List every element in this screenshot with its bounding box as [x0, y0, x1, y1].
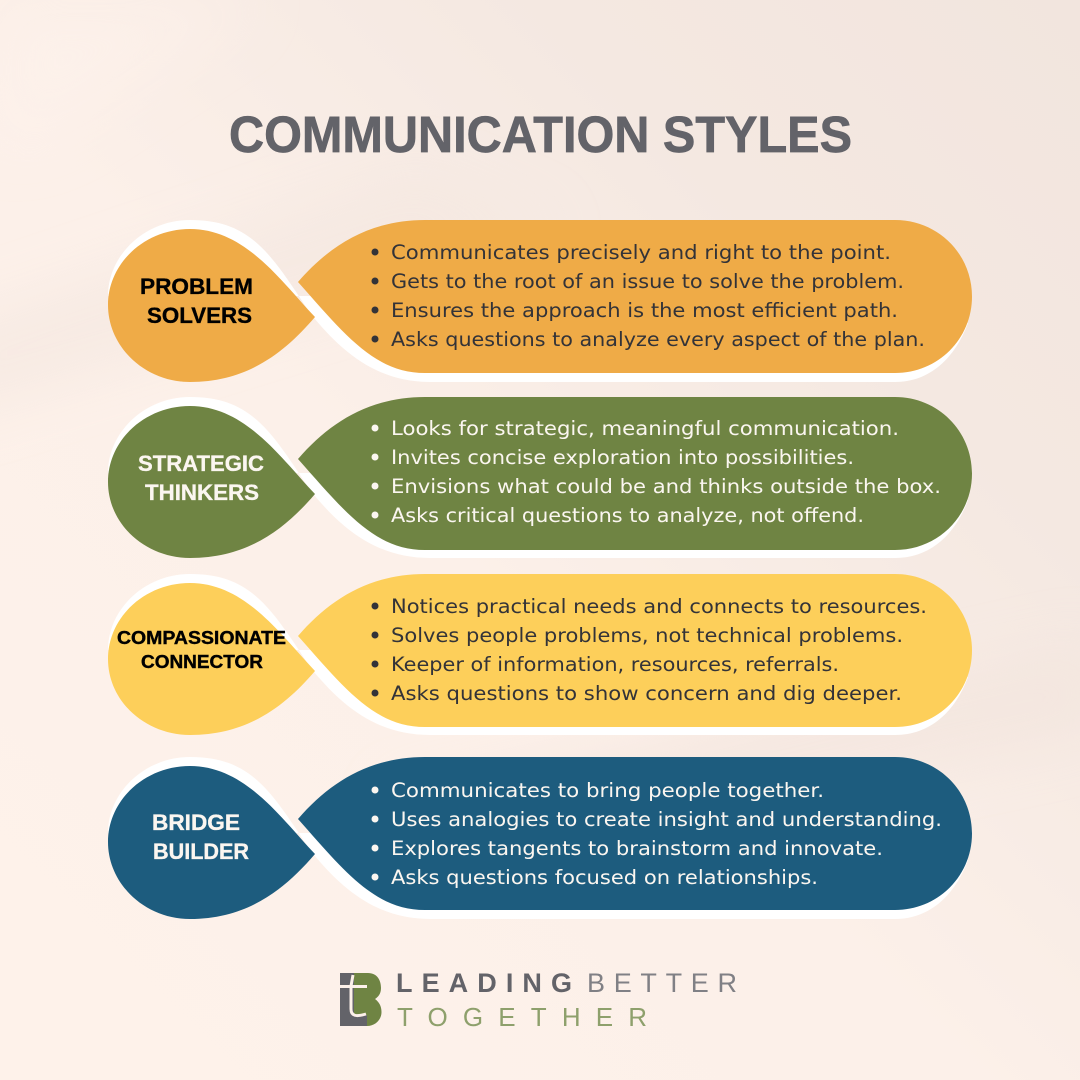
bullet list [372, 241, 925, 351]
bullet list: Gets to the root of an issue to solve the problem. [391, 270, 904, 293]
text pill [298, 220, 972, 373]
logo [340, 968, 737, 1032]
bullet list: Asks critical questions to analyze, not offend. [391, 504, 864, 527]
bullet list [372, 417, 941, 527]
bullet list: Notices practical needs and connects to resources. [391, 595, 927, 618]
icon: logo mark [340, 973, 382, 1026]
label: PROBLEM [140, 274, 253, 299]
bullet list: Communicates precisely and right to the point. [391, 241, 891, 264]
bullet list: Asks questions to analyze every aspect of the plan. [391, 328, 925, 351]
title: COMMUNICATION STYLES [229, 106, 852, 163]
bullet list: Communicates to bring people together. [391, 779, 824, 802]
label: BRIDGE [152, 810, 240, 835]
label: SOLVERS [147, 303, 252, 328]
white backing band [108, 757, 968, 919]
bullet list [372, 595, 927, 705]
bullet list: Envisions what could be and thinks outside the box. [391, 475, 941, 498]
text pill [298, 397, 972, 550]
bullet list: Asks questions focused on relationships. [391, 866, 818, 889]
label drop [108, 583, 315, 735]
panel: compassionate connector [108, 574, 972, 735]
label: CONNECTOR [141, 652, 263, 672]
label [138, 451, 264, 505]
bullet list [372, 779, 942, 889]
bullet list: Explores tangents to brainstorm and innovate. [391, 837, 883, 860]
bullet list: Solves people problems, not technical problems. [391, 624, 903, 647]
bullet list: Asks questions to show concern and dig deeper. [391, 682, 902, 705]
white backing band [108, 574, 968, 735]
panel: strategic thinkers [108, 397, 972, 558]
bullet list: Keeper of information, resources, referrals. [391, 653, 839, 676]
white backing band [108, 220, 968, 382]
label [117, 628, 286, 672]
bullet list: Looks for strategic, meaningful communication. [391, 417, 899, 440]
label drop [108, 229, 315, 382]
label [152, 810, 249, 864]
wordmark: BETTER [587, 968, 737, 998]
label drop [108, 406, 315, 558]
bullet list: Uses analogies to create insight and understanding. [391, 808, 942, 831]
bullet list: Ensures the approach is the most efficient path. [391, 299, 898, 322]
label: STRATEGIC [138, 451, 264, 476]
panel: problem solvers [108, 220, 972, 382]
label [140, 274, 253, 328]
label: THINKERS [145, 480, 259, 505]
label: COMPASSIONATE [117, 628, 286, 648]
label drop [108, 766, 315, 919]
label: BUILDER [153, 839, 249, 864]
wordmark: LEADING [396, 968, 572, 998]
bullet list: Invites concise exploration into possibilities. [391, 446, 854, 469]
panel: bridge builder [108, 757, 972, 919]
text pill [298, 574, 972, 727]
wordmark [396, 968, 737, 1032]
wordmark: TOGETHER [397, 1002, 647, 1032]
text pill [298, 757, 972, 910]
white backing band [108, 397, 968, 558]
